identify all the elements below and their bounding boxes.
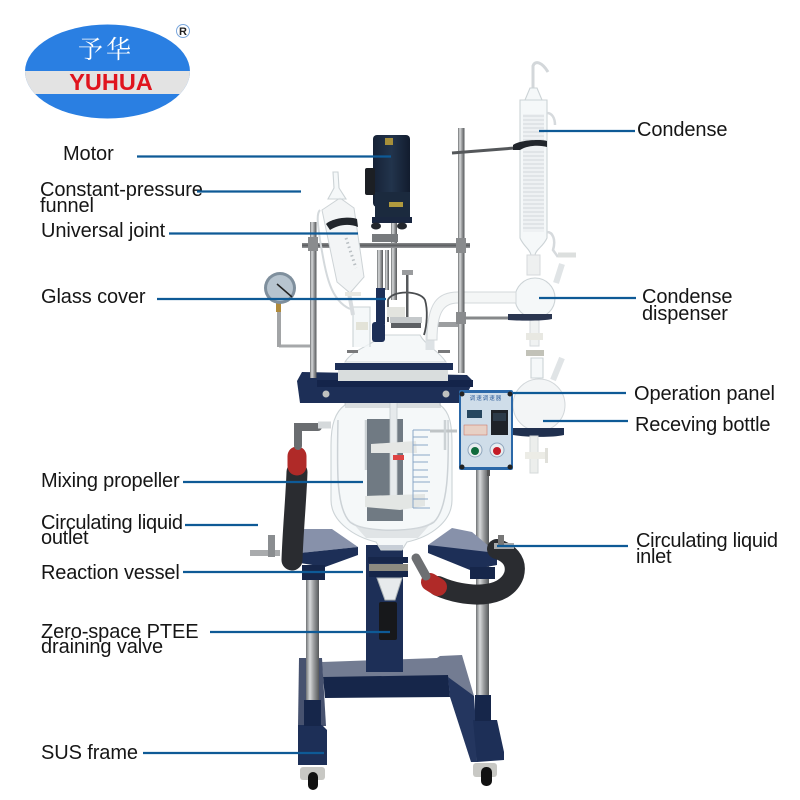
label: Universal joint: Universal joint: [41, 220, 166, 242]
left rack with clamp: [276, 222, 470, 378]
label: Mixing propeller: Mixing propeller: [41, 470, 180, 492]
casters: [300, 763, 497, 790]
label: Constant-pressure funnel: funnel: [40, 195, 94, 217]
tripod plates: [300, 528, 497, 580]
label: Constant-pressure funnel: Constant-pressure: [40, 179, 203, 201]
machine: base frame: [298, 545, 504, 765]
support poles: [304, 470, 491, 726]
label: Circulating liquid inlet: [497, 530, 778, 568]
valve fittings: [250, 470, 514, 557]
label: Circulating liquid inlet: inlet: [636, 546, 672, 568]
condense dispenser: [427, 255, 576, 356]
logo: YUHUA: YUHUA: [69, 69, 153, 95]
lifting plate and lid flange: [297, 363, 473, 403]
label: Zero-space PTEE draining valve: [41, 621, 390, 658]
label: Motor: Motor: [63, 143, 114, 165]
label: Zero-space PTEE draining valve: Zero-space PTEE: [41, 621, 198, 643]
label: Condense dispenser: dispenser: [642, 303, 728, 325]
reaction vessel: [318, 388, 457, 550]
glass cover: [345, 307, 450, 362]
label: Operation panel: Operation panel: [634, 383, 775, 405]
label: Circulating liquid outlet: Circulating liquid: [41, 512, 183, 534]
logo: YUHUA: R: [179, 26, 187, 38]
receiving bottle: [513, 358, 565, 473]
label: Condense dispenser: [539, 286, 732, 325]
drain valve: [368, 557, 408, 640]
label: Circulating liquid outlet: [41, 512, 258, 549]
label: Constant-pressure funnel: [40, 179, 301, 217]
label: Circulating liquid inlet: Circulating liquid: [636, 530, 778, 552]
condenser: [520, 63, 558, 257]
logo: YUHUA: 予华: [78, 30, 134, 66]
logo: YUHUA: [20, 24, 195, 118]
label: SUS frame: SUS frame: [41, 742, 138, 764]
constant-pressure funnel: [318, 172, 364, 315]
motor: [365, 135, 412, 242]
label: Condense: Condense: [637, 119, 727, 141]
label: Reaction vessel: Reaction vessel: [41, 562, 180, 584]
label: Glass cover: Glass cover: [41, 286, 146, 308]
operation panel: 调速调速器: [470, 394, 502, 402]
label: Circulating liquid outlet: outlet: [41, 527, 89, 549]
stirrer coupling: [372, 222, 461, 342]
insulated hoses: [292, 427, 515, 595]
pressure gauge: [264, 272, 296, 304]
label: Condense dispenser: Condense: [642, 286, 732, 308]
label: Zero-space PTEE draining valve: draining valve: [41, 636, 163, 658]
stand pole with condenser clamps: [452, 128, 552, 373]
label: Receving bottle: Receving bottle: [635, 414, 770, 436]
operation panel: [459, 390, 513, 470]
